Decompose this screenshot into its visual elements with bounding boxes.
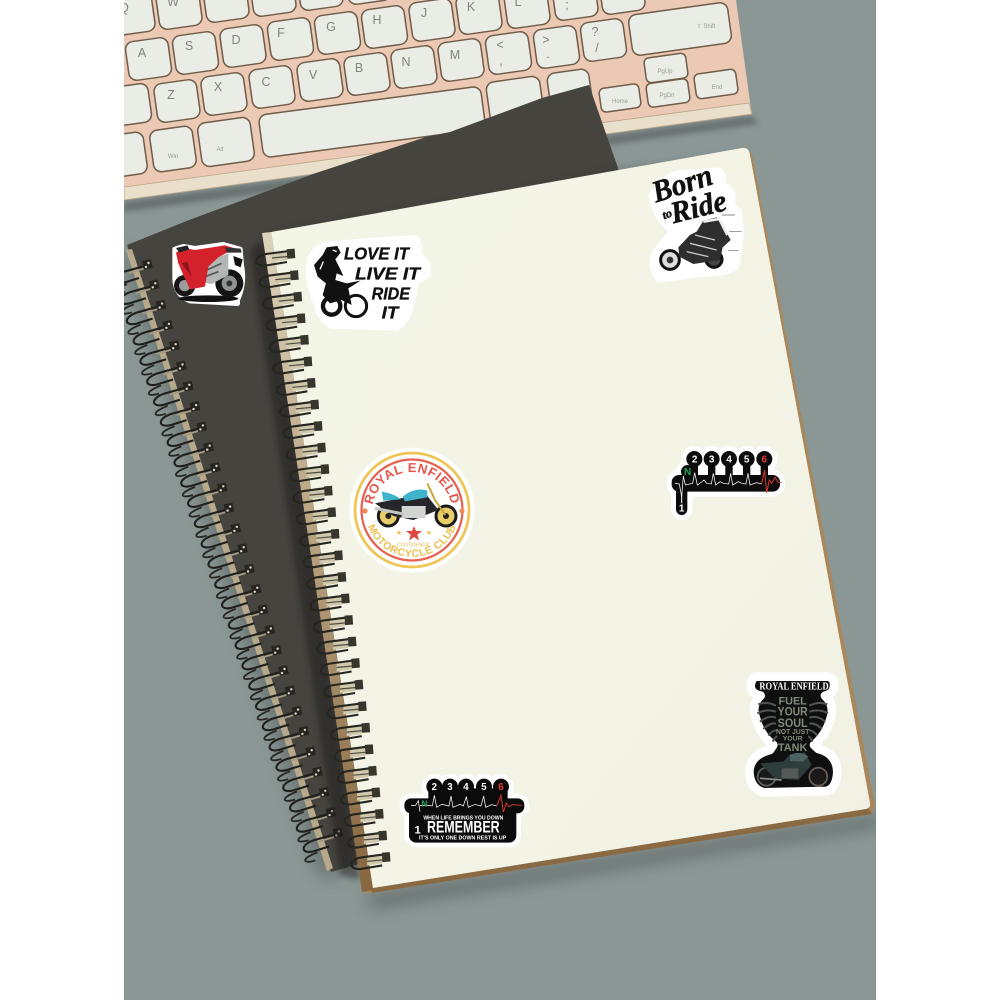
gear numbers: 2: [692, 455, 698, 466]
slogan: [776, 696, 810, 754]
key letters: [119, 0, 599, 102]
slogan: REMEMBER: [427, 818, 500, 837]
key letters: .: [546, 47, 550, 61]
key letters: F: [277, 26, 285, 40]
gear numbers: 5: [481, 782, 487, 793]
slogan: FUEL: [778, 696, 807, 708]
gear numbers: 3: [709, 455, 715, 466]
keyboard front lip: [124, 103, 752, 200]
stars and continental label: ★: [396, 529, 402, 537]
key letters: J: [421, 6, 427, 20]
gear numbers: [679, 455, 768, 514]
back notebook page edge: [126, 249, 333, 871]
royal enfield logo: ROYAL ENFIELD: [759, 681, 829, 693]
sticker: red sport bike: [174, 245, 243, 303]
gear numbers: 5: [744, 455, 750, 466]
gear numbers: N: [684, 467, 691, 478]
sticker: born to ride: [647, 158, 744, 283]
page block edge: [362, 149, 875, 893]
gear numbers: 6: [498, 782, 504, 793]
motorcycle: [375, 483, 456, 526]
key letters: X: [214, 80, 223, 94]
top page: [271, 148, 870, 888]
keyboard: [100, 0, 752, 200]
back notebook cover: [113, 85, 640, 872]
slogan: TANK: [778, 742, 808, 754]
stars and continental label: CONTINENTAL: [397, 542, 431, 548]
slogan: WHEN LIFE BRINGS YOU DOWN: [423, 816, 503, 822]
rider and dirt bike: [314, 246, 367, 317]
sticker black shape: [672, 451, 780, 515]
slogan: IT'S ONLY ONE DOWN REST IS UP: [419, 836, 507, 842]
gear numbers: 4: [463, 782, 469, 793]
key letters: ?: [592, 25, 599, 39]
heartbeat line: [675, 473, 762, 497]
back notebook shadow: [122, 250, 340, 880]
gear numbers: 1: [415, 824, 421, 836]
slogan: SOUL: [778, 716, 808, 730]
lettering: [652, 170, 726, 224]
front notebook shadow: [366, 816, 884, 908]
lettering: Born: [647, 158, 717, 210]
heartbeat line: [411, 795, 497, 812]
slogan: YOUR: [778, 705, 808, 719]
gear numbers: 1: [679, 503, 685, 514]
sticker: royal enfield badge: MOTORCYCLE CLUB: [368, 524, 455, 557]
key letters: H: [372, 13, 382, 27]
slogan: NOT JUST: [776, 729, 810, 736]
back notebook rings: [113, 259, 343, 862]
keyboard shadow: [124, 116, 758, 212]
slogan: [419, 816, 507, 842]
key letters: /: [595, 41, 599, 55]
key letters: N: [401, 55, 411, 69]
stars and continental label: ★: [426, 529, 432, 537]
key letters: A: [138, 46, 147, 60]
key letters: D: [231, 33, 241, 47]
key small labels: PgUp: [657, 69, 673, 75]
key letters: M: [450, 48, 460, 62]
lettering: [344, 243, 422, 323]
wings: [757, 703, 828, 742]
key small labels: Win: [168, 154, 178, 160]
key letters: Q: [119, 1, 129, 15]
keys: [100, 0, 739, 179]
key letters: >: [542, 33, 550, 47]
lettering: to: [660, 206, 674, 222]
key letters: ,: [499, 54, 503, 68]
key letters: Z: [167, 88, 175, 102]
sticker: love it live it ride it: [306, 235, 431, 331]
gear numbers: 4: [726, 455, 732, 466]
lettering: RIDE: [372, 283, 411, 303]
sticker halo: [175, 245, 243, 303]
key letters: V: [309, 68, 318, 82]
key small labels: Alt: [216, 147, 224, 153]
front notebook rings: [256, 249, 391, 869]
sticker: fuel your soul: [749, 677, 837, 792]
gear numbers: 6: [762, 455, 768, 466]
sticker: royal enfield badge: [350, 448, 474, 572]
stars and continental label: [396, 526, 432, 548]
lettering: Ride: [666, 183, 730, 230]
sticker: royal enfield badge: ROYAL ENFIELD: [364, 463, 459, 504]
key small labels: ⇧ Shift: [697, 23, 716, 30]
lettering: LOVE IT: [344, 243, 411, 263]
sticker black shape: [404, 779, 524, 843]
key letters: B: [355, 61, 363, 75]
gear numbers: [415, 782, 504, 836]
sticker halo: [672, 451, 780, 515]
key letters: <: [496, 38, 504, 52]
sticker halo: [404, 779, 524, 843]
key letters: G: [326, 20, 336, 34]
slogan: YOUR: [783, 736, 803, 743]
key small labels: End: [712, 85, 722, 91]
front notebook: [256, 148, 875, 893]
lettering: LIVE IT: [355, 263, 422, 283]
key letters: C: [261, 75, 271, 89]
sticker: gear shift heartbeat: [672, 451, 782, 515]
motorcycle: [758, 752, 827, 786]
gear numbers: 3: [447, 782, 453, 793]
motorcycle rider: [661, 215, 742, 269]
key small labels: [168, 23, 722, 160]
keyboard body: [124, 0, 752, 200]
lettering: IT: [382, 303, 400, 323]
sticker: remember gear shift: [404, 779, 524, 843]
key letters: S: [185, 39, 193, 53]
key small labels: PgDn: [659, 93, 675, 99]
key small labels: Home: [612, 99, 629, 105]
side dots: [362, 508, 368, 514]
gear numbers: 2: [432, 782, 437, 793]
spine strip: [262, 232, 373, 892]
sticker silhouette with halo: [749, 677, 837, 792]
photo background: [124, 0, 876, 1000]
key letters: K: [467, 0, 476, 14]
gear numbers: N: [421, 799, 427, 809]
